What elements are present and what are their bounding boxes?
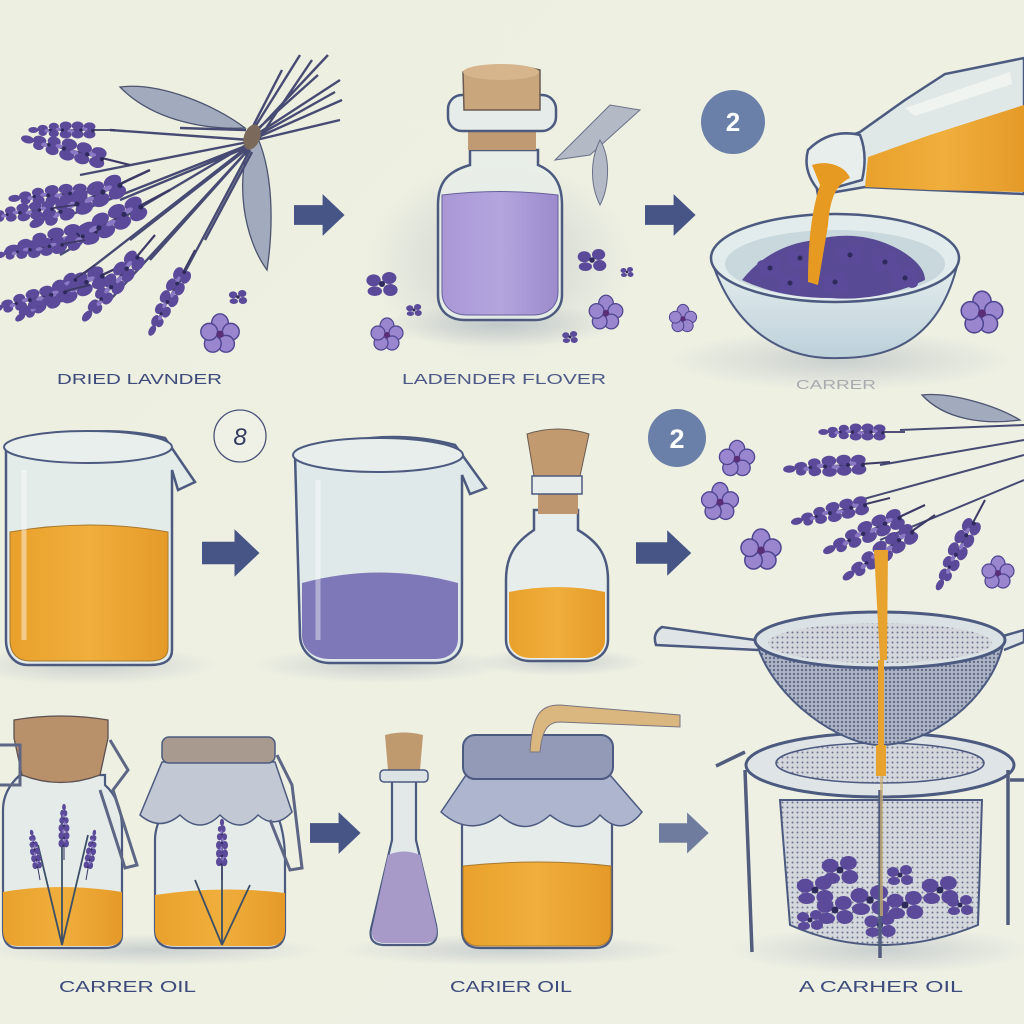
- icon: jar 2: [155, 810, 285, 948]
- arrow: [294, 194, 345, 236]
- panel: lavender over strainer: [702, 395, 1024, 595]
- icon: cork: [463, 65, 540, 110]
- icon: pouring tube: [530, 705, 680, 752]
- icon: pouring oil: [808, 163, 850, 285]
- panel: narrow flask: [371, 732, 437, 945]
- panel: beaker of purple liquid: [293, 437, 486, 663]
- icon: lavender leaves: [120, 86, 271, 270]
- panel: strainer over pot: [655, 550, 1024, 958]
- icon: jar 1: [3, 775, 122, 948]
- panel: dried lavender bundle: [0, 55, 342, 352]
- panel: jar of lavender oil: [366, 64, 697, 350]
- icon: flower: [201, 314, 239, 352]
- step badge: 8: [233, 424, 247, 451]
- icon: strainer rim: [755, 612, 1005, 668]
- arrow: [645, 194, 696, 236]
- icon: strainer bowl: [757, 645, 1003, 745]
- icon: collar: [448, 95, 556, 131]
- step badge: [701, 90, 765, 154]
- icon: jar 1 sprigs: [38, 810, 88, 945]
- panel: small bottle with cork: [506, 429, 608, 661]
- icon: pot rim: [746, 733, 1014, 797]
- arrow: [310, 812, 361, 854]
- icon: cloth cover: [441, 775, 642, 826]
- step badge: 2: [726, 107, 740, 137]
- icon: bowl: [712, 262, 958, 358]
- icon: purple fill: [302, 572, 458, 659]
- icon: background sprig: [555, 105, 640, 205]
- label: carrier: CARRER: [796, 377, 876, 392]
- icon: twine tie: [240, 122, 264, 152]
- icon: purple liquid: [442, 192, 558, 315]
- icon: cork: [538, 492, 578, 514]
- icon: lavender buds in bowl: [742, 236, 925, 299]
- soft shadows: [0, 160, 1024, 974]
- step badge: [648, 409, 706, 467]
- label: dried lavender: DRIED LAVNDER: [57, 372, 222, 388]
- arrow: [202, 529, 260, 577]
- icon: strainer handle: [655, 627, 1024, 650]
- step badge: 2: [669, 424, 685, 454]
- panel: beaker of oil: [4, 431, 195, 665]
- step badge: [214, 410, 266, 462]
- arrow: [636, 530, 691, 576]
- label: a carrier oil: A CARHER OIL: [799, 979, 964, 996]
- icon: scattered flowers: [371, 318, 403, 350]
- icon: bottle: [810, 58, 1024, 195]
- label: carrier oil 1: CARRER OIL: [59, 979, 197, 996]
- icon: pot with mesh: [780, 800, 982, 945]
- icon: jar 2 cloth cover: [140, 762, 292, 825]
- panel: jar with cloth and oil: [441, 705, 680, 948]
- icon: oil fill: [10, 525, 168, 661]
- icon: rim: [463, 735, 613, 779]
- arrow: [659, 812, 709, 854]
- icon: oil stream: [874, 550, 888, 776]
- icon: jar 2 sprigs: [195, 820, 250, 945]
- icon: stand: [716, 752, 1024, 958]
- label: carrier oil 2: CARIER OIL: [450, 979, 573, 996]
- icon: stems: [50, 55, 342, 300]
- panel: clamp jars with lavender: [0, 716, 302, 948]
- icon: jar 1 lid: [14, 716, 108, 782]
- icon: bottle body: [438, 150, 562, 320]
- label: lavender flower: LADENDER FLOVER: [402, 372, 606, 388]
- icon: neck cork: [468, 128, 536, 150]
- panel: oil poured into bowl: [711, 58, 1024, 358]
